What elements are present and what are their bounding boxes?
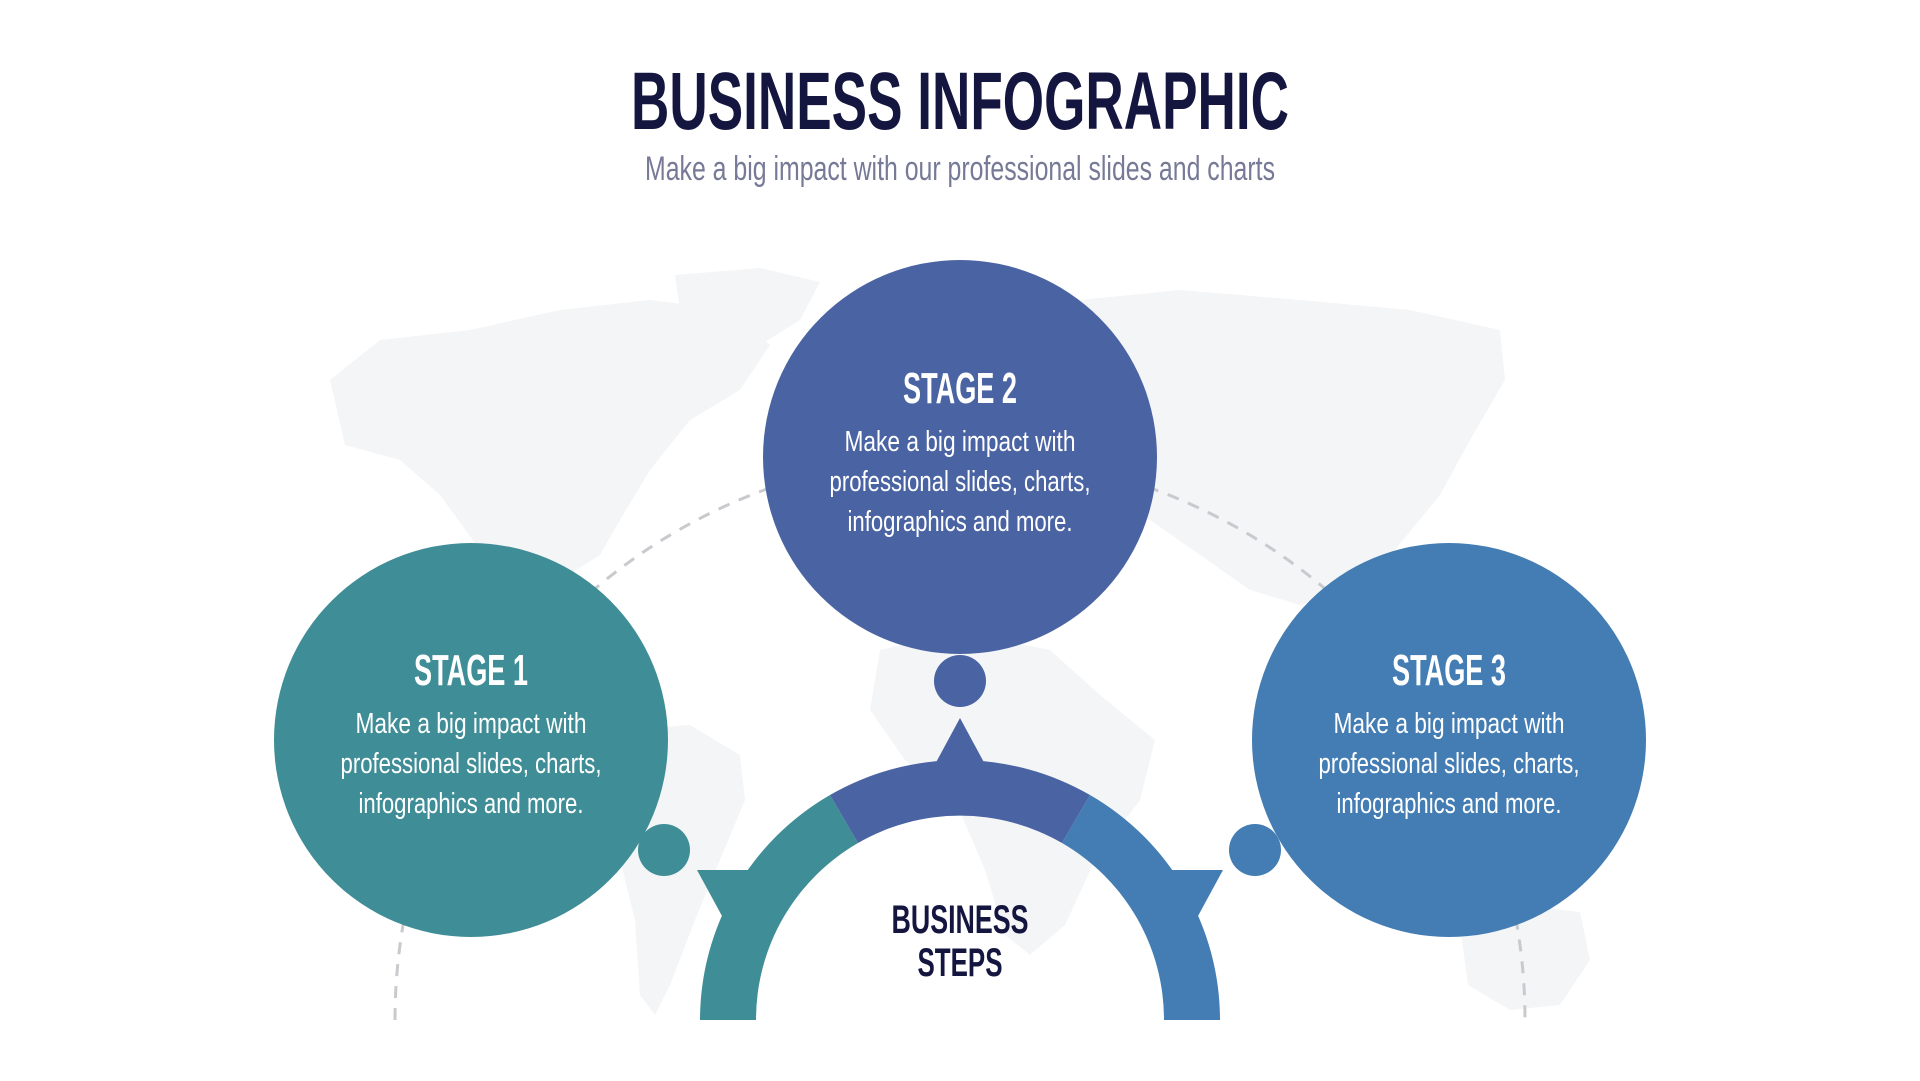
panel: stage 2: infographics and more. [848,506,1072,538]
arrow: right [1168,870,1223,916]
panel: stage 1: Make a big impact with [356,708,586,740]
panel: stage 1: professional slides, charts, [340,748,602,780]
panel: stage 2: STAGE 2 [903,364,1017,413]
panel: stage 3: Make a big impact with [1334,708,1564,740]
panel: stage 1: STAGE 1 [414,646,528,695]
world map background [330,268,1590,1015]
panel: stage 3: STAGE 3 [1392,646,1506,695]
arrow: top [933,718,987,768]
panel: stage 2 [763,260,1157,707]
panel: stage 3 [1229,543,1646,937]
label: business steps: BUSINESS [892,898,1028,942]
panel: stage 2: professional slides, charts, [830,466,1090,498]
panel: stage 3: professional slides, charts, [1318,748,1580,780]
arrow: left [697,870,752,916]
label: business steps [892,898,1028,985]
panel: stage 2: Make a big impact with [844,426,1076,458]
panel: stage 3: infographics and more. [1336,788,1562,820]
panel: stage 1 [274,543,690,937]
title: BUSINESS INFOGRAPHIC [631,56,1289,147]
central arc: business steps [697,718,1223,1020]
dashed connector arc [395,455,1525,1020]
label: business steps: STEPS [918,941,1002,985]
panel: stage 1: infographics and more. [358,788,584,820]
subtitle: Make a big impact with our professional slides and charts [645,150,1275,188]
